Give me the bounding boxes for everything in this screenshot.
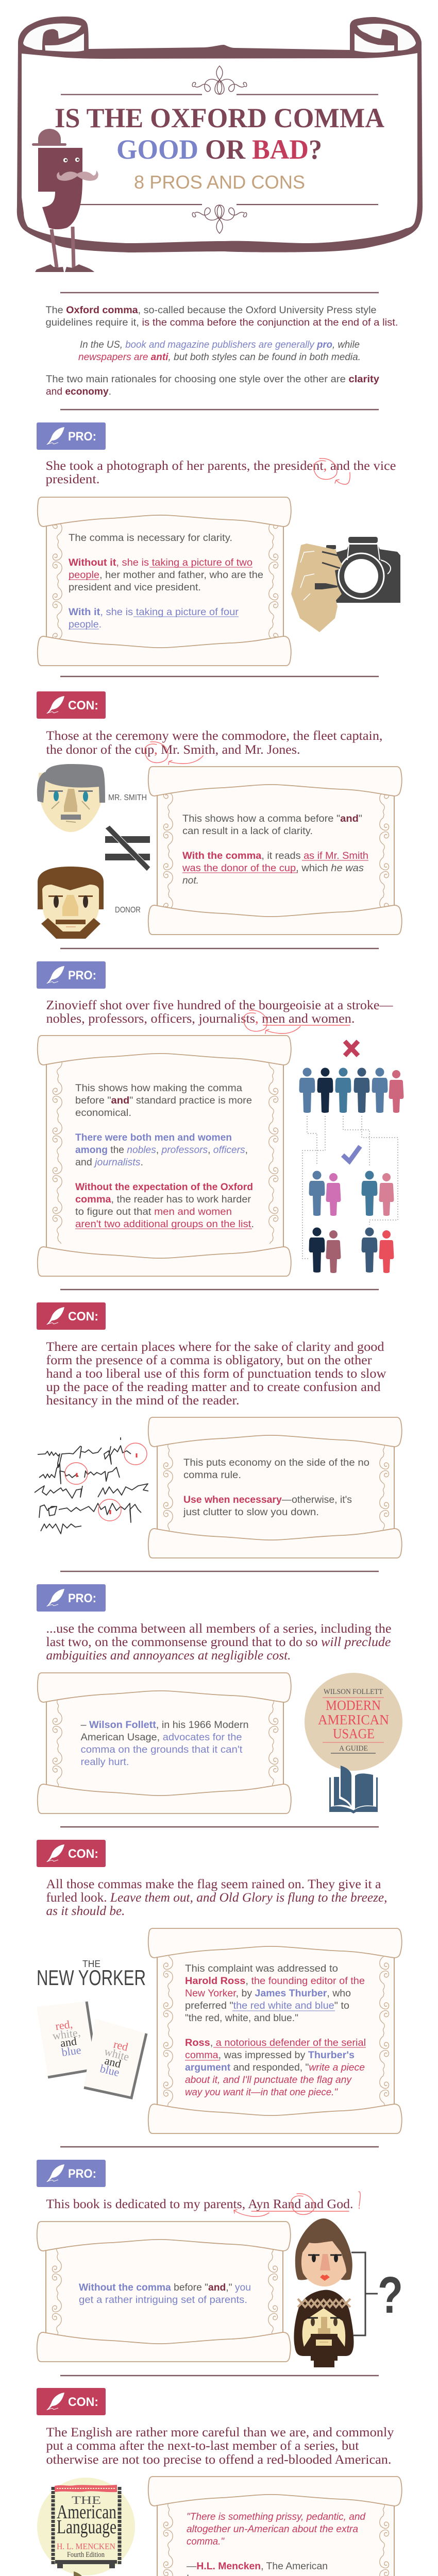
panel text: president and vice president. [69,582,201,593]
icon: Mr. Smith face [37,764,105,832]
panel text: New Yorker, by James Thurber, who [185,1988,351,1999]
panel text [187,2512,366,2576]
logo: The New Yorker: NEW YORKER [37,1965,146,1990]
badge: pro [37,961,106,989]
panel text: among the nobles, professors, officers, [75,1145,248,1156]
panel text: was the donor of the cup , which he was [182,863,364,874]
panel text [69,533,263,630]
card: without commas [84,2019,147,2099]
icon: open book [62,2571,111,2576]
section 7: pro [37,2160,403,2367]
section 5: pro [37,1584,402,1814]
illustration: book cover The American Language: Fourth Edition [67,2551,105,2559]
panel text: people, her mother and father, who are the [69,570,263,581]
not-equal sign [105,825,150,871]
scroll frame [17,16,423,252]
icon: check mark [343,1146,360,1161]
panel text: Use when necessary—otherwise, it's [183,1495,352,1505]
panel text [185,1963,366,2098]
panel text: This shows how making the comma [75,1083,242,1094]
panel text: Without it , she is taking a picture of two [69,557,252,568]
paragraph: US usage: In the US, book and magazine publishers are generally pro, while [80,340,360,350]
panel text: —H.L. Mencken, The American [187,2561,328,2572]
badge: con [37,2388,106,2415]
panel text: There were both men and women [75,1132,232,1143]
section 6: con [37,1840,402,2133]
panel text: Without the comma before "and," you [79,2282,251,2293]
illustration: book cover The American Language [37,2478,135,2576]
badge: con: CON: [68,2395,98,2409]
bottom flourish [192,205,247,233]
section 4: con [35,1302,402,1558]
illustration: book cover The American Language: THE [72,2494,101,2506]
panel text [75,1083,254,1230]
example sentence [46,729,382,757]
example sentence: ...use the comma between all members of a series, including the [46,1622,392,1636]
badge: pro: PRO: [68,2167,96,2181]
comma annotation [145,742,203,765]
panel text: This complaint was addressed to [185,1963,338,1974]
card: with commas: blue [61,2043,82,2059]
panel text: really hurt. [80,1757,129,1768]
panel text: and journalists. [75,1157,143,1168]
people pairs [309,1171,394,1273]
panel text: preferred "the red white and blue " to [185,2001,349,2011]
comma annotation [234,2192,360,2216]
bracket connector [351,2252,378,2335]
panel text: get a rather intriguing set of parents. [79,2295,247,2306]
subtitle: 8 PROS AND CONS [134,172,305,193]
example sentence [45,459,396,486]
logo: The New Yorker: THE [82,1959,100,1969]
paragraph: definition: The Oxford comma , so-called because the Oxford University Press style [45,305,376,316]
panel: scroll card [38,497,291,666]
panel text: The comma is necessary for clarity. [69,533,232,544]
illustration: book cover Modern American Usage: MODERN [326,1698,381,1713]
paragraph: definition: guidelines require it, is the comma before the conjunction at the end of a list. [45,317,398,328]
badge: pro: PRO: [68,430,96,444]
panel text: Without the expectation of the Oxford [75,1182,253,1193]
panel text: This shows how a comma before " and" [182,814,362,824]
panel text: American Usage, advocates for the [80,1732,242,1743]
badge: pro: PRO: [68,969,96,982]
example sentence: as it should be. [46,1904,125,1918]
panel text: With it, she is taking a picture of four [69,607,239,618]
example sentence [46,1877,388,1918]
badge: pro [37,422,106,450]
panel: scroll card [148,2477,402,2576]
paragraph: definition [45,305,398,328]
example sentence: hand a too liberal use of this form of punctuation tends to slow [46,1367,386,1381]
intro block [45,305,398,397]
panel text: to figure out that men and women [75,1207,232,1217]
badge: con: CON: [68,1847,98,1861]
illustration: book cover Modern American Usage: USAGE [333,1726,375,1741]
illustration: book cover The American Language: American [57,2501,116,2523]
comma annotation [244,1010,350,1033]
panel text: altogether un-American about the extra [187,2524,358,2535]
header scroll banner [17,16,423,272]
panel text: way you want it—in that one piece." [185,2087,338,2098]
panel text [183,1458,369,1518]
icon: Ayn Rand face [295,2218,352,2286]
example sentence: Those at the ceremony were the commodore, the fleet captain, [46,729,382,743]
panel: scroll card [38,1036,291,1276]
example sentence: up the pace of the reading matter and to create confusion and [46,1380,381,1394]
comma mascot [32,129,98,272]
section 1: pro [37,422,400,666]
panel text: With the comma , it reads as if Mr. Smith [182,851,368,861]
paragraph: rationales: The two main rationales for choosing one style over the other are clarity [46,374,379,385]
example sentence: last two, on the commonsense ground that to do so will preclude [46,1635,391,1649]
illustration: book cover The American Language: H. L. MENCKEN [57,2541,115,2551]
card: without commas: blue [99,2062,121,2079]
top flourish [192,66,247,94]
illustration: book cover Modern American Usage: AMERICAN [318,1712,389,1727]
red circled commas [65,1443,147,1521]
panel: scroll card [148,767,402,935]
example sentence: There are certain places where for the sake of clarity and good [46,1340,384,1354]
illustration: book cover Modern American Usage: WILSON FOLLETT [324,1688,383,1696]
panel text: comma." [187,2536,225,2547]
badge: pro [37,1584,106,1612]
comma annotation [314,459,350,484]
panel text: before "and" standard practice is more [75,1095,252,1106]
icon: question mark: ? [378,2266,403,2324]
card: without commas: red [112,2038,129,2054]
paragraph: rationales [46,374,379,397]
card: without commas: white [103,2045,130,2063]
title: IS THE OXFORD COMMA [55,103,384,133]
example sentence: form the presence of a comma is obligatory, but on the other [46,1353,372,1367]
example sentence: nobles, professors, officers, journalists , men and women. [46,1012,355,1026]
panel text: "There is something prissy, pedantic, and [187,2512,366,2522]
panel text [182,814,368,886]
badge: con [37,691,106,719]
example sentence: This book is dedicated to my parents, Ayn Rand and God. [46,2197,353,2211]
panel text: This puts economy on the side of the no [183,1458,369,1468]
example sentence: the donor of the cup , Mr. Smith, and Mr. Jones. [46,743,300,757]
panel text: Ross, a notorious defender of the serial [185,2038,366,2048]
dotted connectors [302,1116,398,1259]
badge: pro: PRO: [68,1591,96,1605]
panel text: about it, and I'll punctuate the flag any [185,2075,352,2086]
badge: pro [37,2160,106,2187]
card: with commas [37,2002,97,2077]
icon: cross mark [345,1041,358,1056]
example sentence: otherwise are not too precise to offend a red-blooded American. [46,2453,391,2467]
people row: list reading [299,1067,404,1113]
panel text: argument and responded, "write a piece [185,2062,365,2073]
card: with commas: white, [52,2026,81,2042]
panel: scroll card [37,2222,291,2362]
panel text: comma rule. [183,1470,241,1481]
example sentence: ambiguities and annoyances at negligible cost. [46,1649,291,1663]
panel: scroll card [38,1673,291,1814]
example sentence: Zinovieff shot over five hundred of the bourgeoisie at a stroke— [46,998,394,1012]
example sentence: hesitancy in the mind of the reader. [46,1394,239,1408]
example sentence [46,1340,386,1408]
panel text [79,2282,251,2306]
badge: con [37,1840,106,1867]
chart: grouping of people [299,1041,404,1273]
panel: scroll card [148,1417,402,1558]
section 8: con [37,2388,402,2576]
badge: con: CON: [68,1310,98,1324]
example sentence [46,1622,392,1663]
card: with commas: red, [55,2018,73,2032]
panel text: economical. [75,1108,131,1118]
badge: con [37,1302,106,1330]
paragraph: US usage: newspapers are anti, but both styles can be found in both media. [78,352,361,363]
label: Mr. Smith: MR. SMITH [108,793,147,802]
section 2: con [37,691,402,939]
icon: hand holding camera [291,537,400,632]
example sentence: put a comma after the next-to-last member of a series, but [46,2439,359,2453]
panel text: not. [182,875,199,886]
example sentence: She took a photograph of her parents, the president , and the vice [45,459,396,473]
illustration: book cover Modern American Usage [305,1673,402,1814]
panel text: people. [69,619,102,630]
panel: scroll card [148,1928,402,2133]
illustration: two cards red white blue [37,2002,147,2099]
panel text: comma, was impressed by Thurber's [185,2050,355,2061]
panel text: aren't two additional groups on the list . [75,1219,254,1230]
icon: open book [329,1766,378,1814]
example sentence: president. [45,472,100,486]
panel text: can result in a lack of clarity. [182,826,313,837]
example sentence: The English are rather more careful than we are, and commonly [46,2426,394,2439]
panel text: comma on the grounds that it can't [80,1744,243,1755]
badge: con: CON: [68,699,98,713]
illustration: book cover Modern American Usage: A GUIDE [339,1744,368,1753]
section 3: pro [37,961,404,1276]
illustration: book cover The American Language: Language [57,2516,116,2538]
paragraph: rationales: and economy. [46,386,111,397]
illustration: scribbled handwriting [35,1437,148,1534]
title: GOOD OR BAD? [116,134,322,165]
panel text: – Wilson Follett , in his 1966 Modern [80,1720,248,1731]
panel text [80,1720,248,1768]
paragraph: US usage [78,340,361,363]
icon: bearded man with crown of thorns [294,2290,354,2367]
panel text: just clutter to slow you down. [183,1507,319,1518]
example sentence: furled look. Leave them out, and Old Glory is flung to the breeze, [46,1891,388,1905]
panel text: Harold Ross , the founding editor of the [185,1976,365,1987]
panel text: "the red, white, and blue." [185,2013,298,2024]
card: with commas: and [59,2035,77,2049]
example sentence [46,2426,394,2467]
panel text: comma, the reader has to work harder [75,1194,251,1205]
label: donor: DONOR [115,906,141,914]
example sentence [46,998,394,1026]
icon: donor face [38,867,104,939]
logo: The New Yorker [37,1959,146,1990]
card: without commas: and [104,2054,122,2070]
title [55,103,384,165]
example sentence: All those commas make the flag seem rained on. They give it a [46,1877,381,1891]
